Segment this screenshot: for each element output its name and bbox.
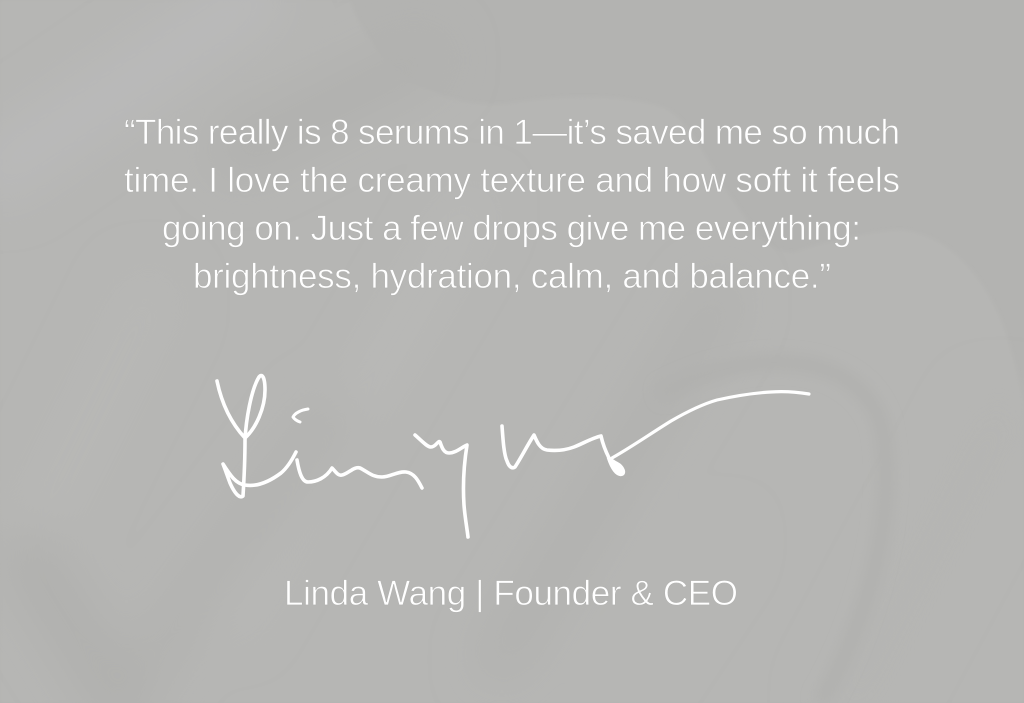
quote text (124, 113, 900, 296)
quote text: time. I love the creamy texture and how soft it feels (124, 161, 900, 200)
quote text: “This really is 8 serums in 1—it’s saved me so much (124, 113, 900, 152)
quote text: brightness, hydration, calm, and balance.” (193, 257, 831, 296)
quote text: going on. Just a few drops give me everything: (162, 209, 861, 248)
attribution: Linda Wang | Founder & CEO (284, 574, 738, 613)
signature (217, 376, 809, 537)
